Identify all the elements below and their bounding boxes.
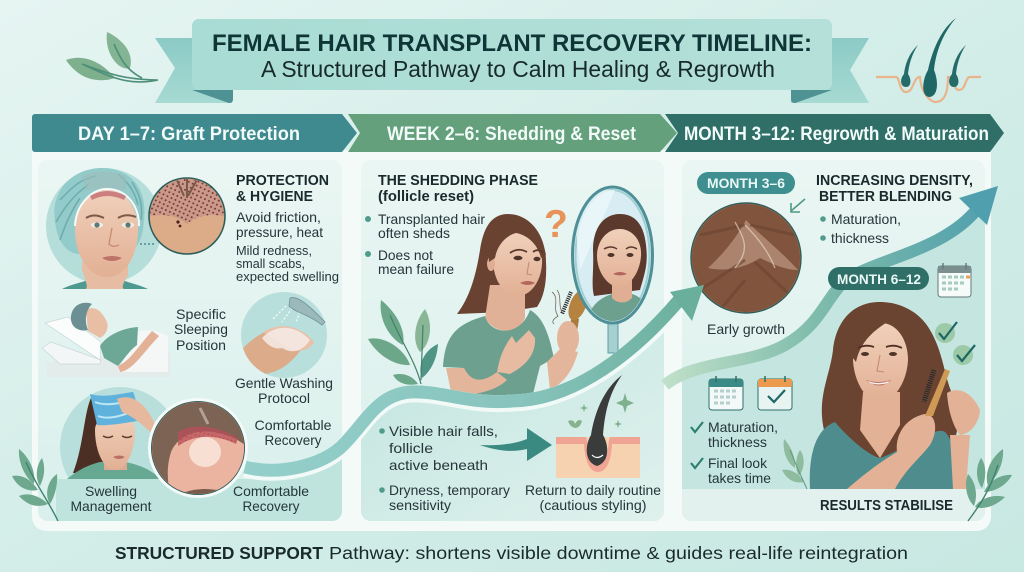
bullets: maturation: thickness — [831, 230, 889, 246]
results band — [682, 489, 985, 521]
heading: increasing density — [816, 173, 973, 205]
bullets: visible hair falls: sensitivity — [389, 497, 451, 513]
label: swelling management: Management — [70, 498, 152, 514]
close-up: early growth scalp — [691, 203, 801, 313]
arrow: regrowth to results — [665, 186, 998, 385]
check list: Maturation, — [708, 419, 778, 435]
header: day 1-7 — [32, 114, 357, 152]
close-up: hairline scalp — [150, 400, 246, 500]
heading: shedding phase: (follicle reset) — [378, 189, 474, 205]
check list — [691, 419, 778, 486]
label: comfortable recovery lower — [233, 483, 309, 514]
pill: month 6-12 — [828, 267, 929, 290]
small arrow to scalp — [791, 199, 805, 212]
title: FEMALE HAIR TRANSPLANT RECOVERY TIMELINE: — [212, 30, 812, 57]
arrow to follicle — [480, 428, 552, 461]
bullets: shedding: often sheds — [378, 225, 450, 241]
text: protection & hygiene: small scabs, — [236, 256, 305, 271]
header: week 2-6 — [348, 114, 677, 152]
label: sleeping position: Position — [176, 337, 226, 353]
heading: shedding phase — [378, 173, 538, 205]
header: month 3-12: MONTH 3–12: Regrowth & Maturation — [684, 124, 989, 145]
bullets: shedding: Transplanted hair — [378, 211, 485, 227]
ribbon right fold — [791, 90, 832, 103]
bullets: shedding — [365, 211, 485, 277]
text: protection & hygiene: PROTECTION — [236, 173, 329, 189]
heading: increasing density: BETTER BLENDING — [819, 189, 952, 205]
text: protection & hygiene: Mild redness, — [236, 243, 312, 258]
panel: week 2-6 — [361, 160, 664, 521]
header: day 1-7: DAY 1–7: Graft Protection — [78, 124, 300, 145]
label: gentle washing — [235, 375, 333, 406]
label: return to daily routine: Return to daily routine — [525, 482, 661, 498]
label: return to daily routine: (cautious styling) — [540, 497, 646, 513]
footer — [115, 543, 908, 563]
label: comfortable recovery lower: Comfortable — [233, 483, 309, 499]
ribbon left tail — [155, 38, 232, 103]
face with surgical cap — [46, 168, 162, 289]
label: swelling management — [70, 483, 152, 514]
heading: increasing density: INCREASING DENSITY, — [816, 173, 973, 189]
bullets: maturation — [820, 211, 901, 246]
bullets: visible hair falls: Visible hair falls, — [389, 423, 498, 439]
label: gentle washing: Gentle Washing — [235, 375, 333, 391]
label: return to daily routine — [525, 482, 661, 513]
bullets: shedding: Does not — [378, 247, 433, 263]
arrow: recovery pathway to month 3 — [245, 285, 704, 472]
text: protection & hygiene: & HYGIENE — [236, 189, 313, 205]
illustration: gentle washing — [241, 292, 327, 378]
illustration: smiling woman with brush — [810, 302, 980, 489]
label: comfortable recovery upper — [254, 417, 332, 448]
close-up: grafts on scalp — [149, 178, 225, 254]
icon: plant — [368, 300, 438, 385]
scalp outline overlapping arrow start — [150, 400, 246, 496]
bullets: visible hair falls — [379, 423, 510, 513]
bullets: maturation: Maturation, — [831, 211, 901, 227]
footer: STRUCTURED SUPPORT — [115, 543, 323, 563]
text: protection & hygiene — [236, 173, 339, 284]
header: week 2-6: WEEK 2–6: Shedding & Reset — [387, 124, 637, 145]
bullets: visible hair falls: Dryness, temporary — [389, 482, 510, 498]
header: month 3-12 — [665, 114, 1004, 152]
pill: month 3-6: MONTH 3–6 — [707, 176, 785, 191]
bullets: visible hair falls: active beneath — [389, 457, 488, 473]
ribbon left fold — [192, 90, 233, 103]
pill: month 6-12: MONTH 6–12 — [837, 272, 921, 287]
panel lower area — [361, 318, 664, 521]
label: comfortable recovery lower: Recovery — [242, 498, 300, 514]
icon: leaves bottom left — [12, 449, 58, 521]
panel lower area — [682, 200, 985, 521]
icon: question mark: ? — [544, 203, 568, 246]
text: protection & hygiene: pressure, heat — [236, 224, 323, 240]
label: sleeping position: Specific — [176, 306, 226, 322]
check list: Final look — [708, 455, 768, 471]
illustration: sleeping position — [42, 303, 170, 377]
icon: happy follicle — [556, 375, 640, 478]
check list: thickness — [708, 434, 767, 450]
icons: green checks — [935, 322, 975, 365]
illustration: mirror — [572, 187, 655, 353]
label: results stabilise: RESULTS STABILISE — [820, 498, 953, 514]
icon: calendar with check — [758, 376, 792, 410]
panel: month 3-12 — [682, 160, 985, 521]
white content frame — [32, 150, 991, 531]
subtitle: A Structured Pathway to Calm Healing & Regrowth — [261, 56, 775, 82]
label: early growth: Early growth — [707, 321, 785, 337]
illustration: swelling management woman — [60, 387, 166, 479]
icon: calendar top — [938, 263, 971, 297]
title banner — [192, 19, 832, 90]
icon: hair follicle top right — [876, 18, 981, 102]
icon: plant by woman — [782, 439, 807, 489]
label: sleeping position — [174, 306, 228, 353]
panel: day 1-7 — [38, 160, 342, 521]
label: swelling management: Swelling — [85, 483, 137, 499]
icon: calendar grid — [709, 376, 743, 410]
label: gentle washing: Protocol — [258, 390, 310, 406]
text: protection & hygiene: Avoid friction, — [236, 209, 321, 225]
ribbon right tail — [791, 38, 869, 103]
heading: shedding phase: THE SHEDDING PHASE — [378, 173, 538, 189]
text: protection & hygiene: expected swelling — [236, 269, 339, 284]
illustration: worried woman with brush — [443, 214, 591, 398]
label: sleeping position: Sleeping — [174, 321, 228, 337]
label: comfortable recovery upper: Recovery — [264, 432, 322, 448]
check list: takes time — [708, 470, 771, 486]
icon: leaves bottom right — [966, 449, 1012, 521]
footer: Pathway: shortens visible downtime & guides real-life reintegration — [329, 543, 908, 563]
label: comfortable recovery upper: Comfortable — [254, 417, 332, 433]
bullets: visible hair falls: follicle — [389, 440, 433, 456]
bullets: shedding: mean failure — [378, 261, 454, 277]
panel lower band — [56, 460, 342, 521]
icon: leaves top left — [66, 32, 158, 82]
pill: month 3-6 — [697, 172, 795, 194]
